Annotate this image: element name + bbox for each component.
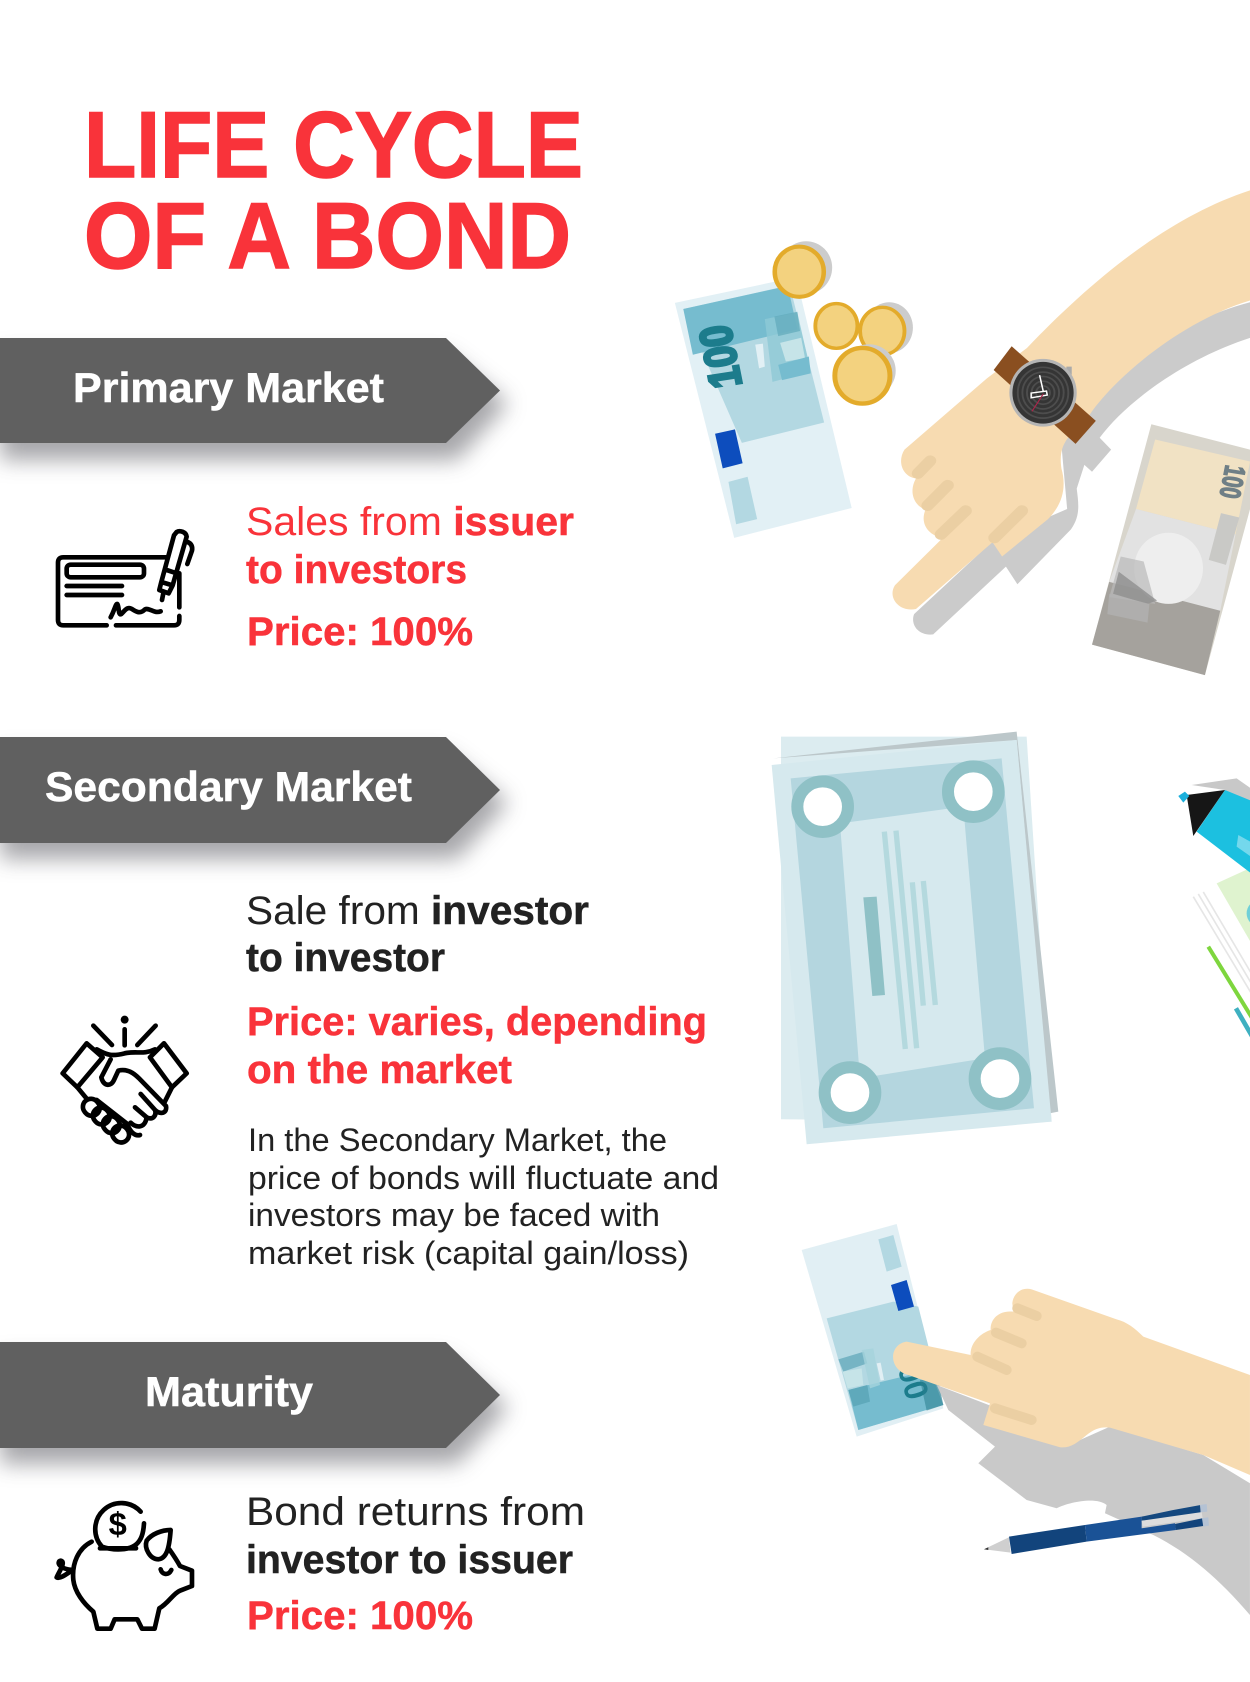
text: secondary market description: to investor (246, 936, 445, 980)
text: maturity description: Bond returns from (246, 1490, 585, 1534)
illustration: highlighter and paper (1178, 778, 1250, 1038)
banner: secondary market: Secondary Market (45, 763, 412, 810)
text: maturity description: investor to issuer (246, 1538, 573, 1582)
illustration: gray banknote (1092, 424, 1250, 675)
illustration: banknote with coins (675, 241, 913, 538)
text: maturity description (246, 1490, 585, 1638)
banner: secondary market (0, 737, 508, 859)
text: primary market description: Price: 100% (247, 610, 473, 654)
text: secondary market description (246, 889, 719, 1271)
text: secondary market description: market risk (capital gain/loss) (248, 1235, 689, 1271)
title (84, 92, 583, 288)
illustration: arm shadow, hand and wristwatch (893, 190, 1250, 635)
text: secondary market description: on the market (247, 1048, 512, 1092)
illustration: blue pen (984, 1504, 1209, 1554)
icon: handshake (63, 1018, 187, 1146)
icon: piggy bank with coin (57, 1503, 192, 1629)
banner: primary market: Primary Market (73, 364, 384, 411)
illustration: pointing hand with banknote (802, 1224, 1250, 1615)
text: secondary market description: In the Secondary Market, the (248, 1122, 667, 1158)
banner: primary market (0, 338, 508, 460)
icon: cheque and pen (58, 531, 192, 625)
banner: maturity: Maturity (145, 1368, 314, 1415)
text: secondary market description: Price: varies, depending (247, 1000, 707, 1044)
icon: piggy bank with coin: $ (109, 1505, 127, 1542)
text: primary market description (246, 500, 574, 654)
illustration: pointing hand with banknote: 00 (890, 1360, 935, 1404)
banner: maturity (0, 1342, 508, 1464)
illustration: banknote with coins: 100 (690, 322, 752, 391)
illustration: stacked banknotes (772, 732, 1058, 1144)
title: OF A BOND (84, 183, 571, 288)
title: LIFE CYCLE (84, 92, 583, 197)
text: secondary market description: Sale from investor (246, 889, 589, 933)
text: primary market description: to investors (246, 548, 467, 592)
text: secondary market description: investors may be faced with (248, 1197, 660, 1233)
text: maturity description: Price: 100% (247, 1594, 473, 1638)
text: primary market description: Sales from issuer (246, 500, 574, 544)
text: secondary market description: price of bonds will fluctuate and (248, 1160, 719, 1196)
